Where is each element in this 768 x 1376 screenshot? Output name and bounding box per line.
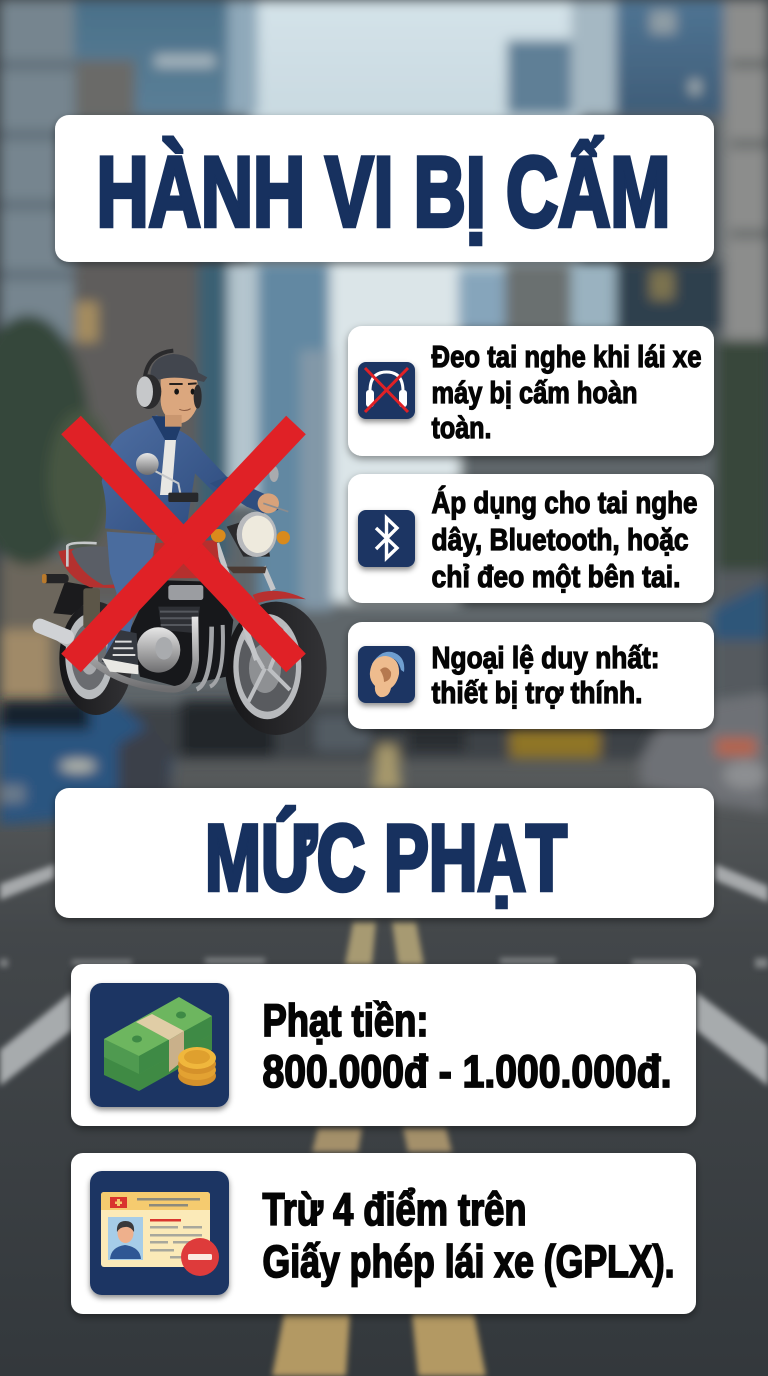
rear wheel: [59, 602, 133, 715]
panel: penalty heading: [55, 788, 714, 918]
panel: title: [55, 115, 714, 262]
text: fine amount: [262, 995, 672, 1097]
text: scope of rule: dây, Bluetooth, hoặc: [432, 522, 688, 557]
panel: headphones rule: [348, 326, 714, 456]
rider body: [102, 415, 227, 533]
text: fine amount: Phạt tiền:: [262, 995, 428, 1046]
text: exception: [432, 640, 660, 710]
text: scope of rule: [432, 485, 698, 594]
icon: headphones: [145, 351, 173, 377]
text: headphones rule: [432, 339, 702, 445]
front fender: [253, 591, 306, 603]
cap: [150, 354, 207, 382]
forks: [217, 543, 273, 660]
text: exception: thiết bị trợ thính.: [432, 675, 642, 710]
distant cars: [180, 700, 275, 756]
right grey car: [640, 692, 768, 812]
panel: exception: [348, 622, 714, 729]
head: [161, 377, 200, 423]
tank and seat: [58, 549, 117, 588]
icon: driving licence with minus badge: [90, 1171, 229, 1295]
tail and frame: [53, 582, 93, 615]
heading: MỨC PHẠT: MỨC PHẠT: [205, 805, 567, 910]
text: licence points: Trừ 4 điểm trên: [262, 1184, 526, 1235]
exhaust pipes: [43, 617, 196, 689]
icon: red prohibition cross: [71, 425, 296, 663]
road markings: [372, 745, 402, 790]
text: headphones rule: Đeo tai nghe khi lái xe: [432, 339, 702, 374]
text: scope of rule: chỉ đeo một bên tai.: [432, 559, 680, 594]
text: scope of rule: Áp dụng cho tai nghe: [432, 485, 698, 520]
motorcycle: [40, 351, 327, 735]
front wheel: [225, 602, 327, 735]
left blue car: [0, 698, 172, 825]
panel: licence points: [71, 1153, 696, 1314]
text: licence points: [262, 1184, 674, 1287]
text: licence points: Giấy phép lái xe (GPLX).: [262, 1236, 674, 1287]
icon: ear with hearing aid: [358, 646, 415, 703]
text: exception: Ngoại lệ duy nhất:: [432, 640, 660, 675]
headlight: [227, 515, 270, 557]
handlebar and mirrors: [150, 468, 182, 500]
illustration: rider with headphones on motorcycle, crossed out: [40, 351, 327, 735]
text: fine amount: 800.000đ - 1.000.000đ.: [262, 1046, 672, 1097]
icon: cash stack and coins: [90, 983, 229, 1107]
panel: scope of rule: [348, 474, 714, 603]
icon: bluetooth: [358, 510, 415, 567]
rider legs: [105, 532, 157, 660]
engine: [130, 580, 233, 687]
icon: headphones crossed out: [358, 362, 415, 419]
panel: fine: [71, 964, 696, 1126]
text: headphones rule: toàn.: [432, 410, 492, 445]
text: headphones rule: máy bị cấm hoàn: [432, 375, 638, 410]
